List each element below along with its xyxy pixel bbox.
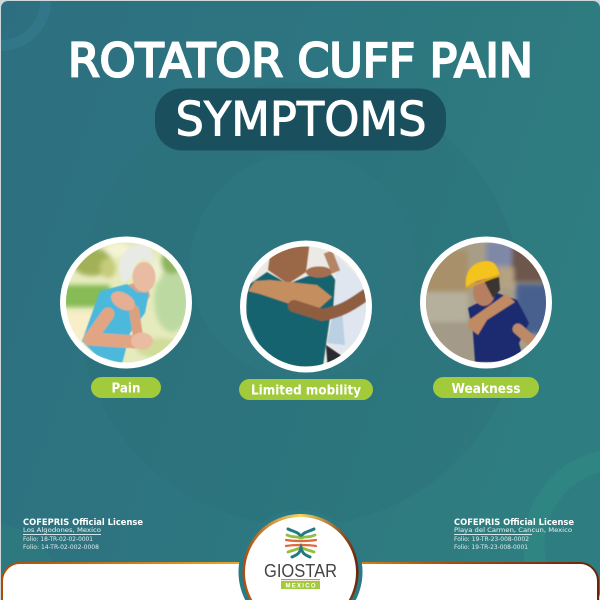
symptom: limited mobility photo <box>240 240 372 372</box>
icon: logo emblem <box>286 529 316 557</box>
symptom: limited mobility label <box>239 379 373 400</box>
logo wordmark: GIOSTAR <box>264 561 337 581</box>
license: right: COFEPRIS Official License <box>454 518 574 528</box>
title: ROTATOR CUFF PAIN <box>68 34 533 88</box>
license: left: Folio: 14-TR-02-002-0008 <box>23 544 99 551</box>
symptom: weakness label: Weakness <box>452 382 521 397</box>
license: right: Folio: 19-TR-23-008-0002 <box>454 536 529 543</box>
license: left <box>23 518 143 551</box>
logo badge <box>238 510 362 600</box>
symptom: pain label: Pain <box>112 382 140 396</box>
logo badge: MEXICO <box>286 584 316 590</box>
symptom: limited mobility label: Limited mobility <box>251 384 361 398</box>
license: right: Folio: 19-TR-23-008-0001 <box>454 544 528 551</box>
subtitle pill: SYMPTOMS <box>176 92 426 148</box>
license: right <box>454 518 574 551</box>
license: left: Los Algodones, Mexico <box>23 526 101 534</box>
symptom: pain photo <box>60 236 192 368</box>
license: left: Folio: 18-TR-02-02-0001 <box>23 536 93 543</box>
footer panel <box>2 563 598 600</box>
license: left: COFEPRIS Official License <box>23 518 143 528</box>
symptom: weakness photo <box>420 236 552 370</box>
symptom: weakness label <box>433 377 539 398</box>
license: right: Playa del Carmen, Cancun, Mexico <box>454 526 572 534</box>
symptom: pain label <box>91 377 161 398</box>
